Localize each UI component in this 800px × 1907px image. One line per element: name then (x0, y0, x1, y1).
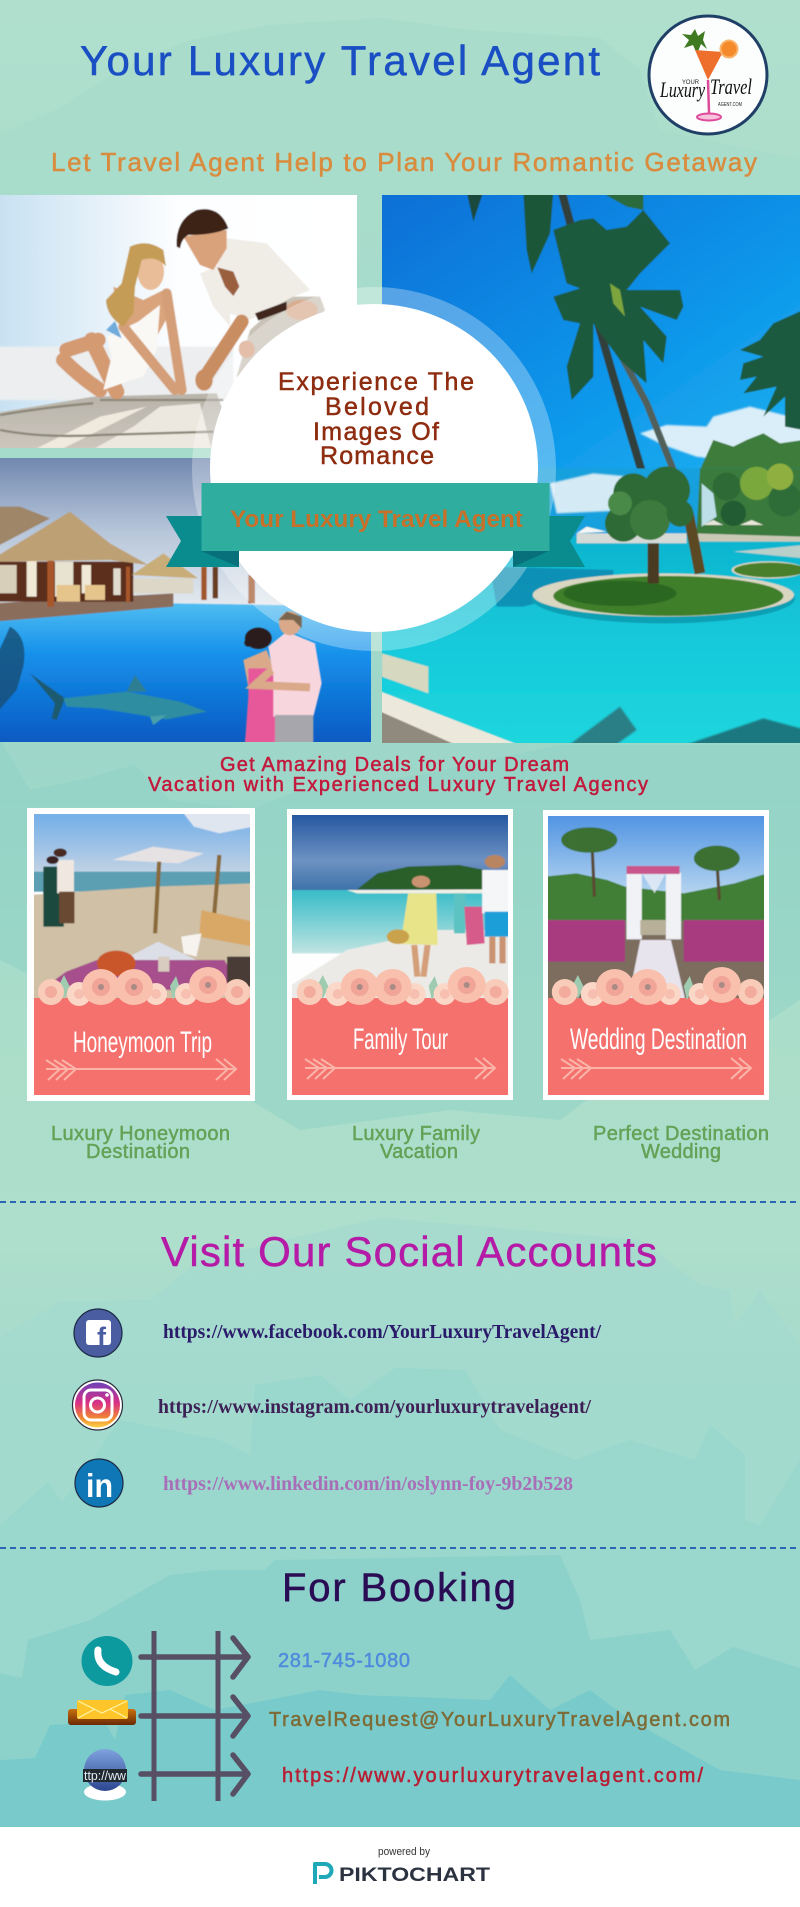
caption: family: Vacation (380, 1141, 458, 1163)
icon: email (68, 1700, 136, 1725)
wedding photo (545, 814, 767, 1003)
couple in front of ring (243, 611, 322, 745)
honeymoon photo (31, 813, 253, 1003)
palm on logo (682, 29, 707, 54)
phone number: 281-745-1080 (278, 1650, 410, 1672)
photo: couple on the beach (0, 190, 367, 457)
icon: globe (83, 1749, 127, 1800)
honeymoon arrow (46, 1059, 236, 1080)
logo script luxury: Luxury (659, 77, 705, 102)
man (237, 297, 325, 377)
line 4: Romance (320, 442, 434, 470)
family photo (289, 813, 511, 1003)
card: wedding destination (543, 810, 769, 1100)
orange slice (720, 40, 738, 58)
glass stem (708, 80, 709, 113)
wedding arrow (561, 1058, 751, 1079)
line 1: Experience The (278, 368, 474, 396)
icon: facebook: f (97, 1322, 107, 1352)
family arrow (305, 1058, 495, 1079)
card: honeymoon trip (27, 808, 255, 1101)
footer band (0, 1827, 800, 1907)
linkedin link: https://www.linkedin.com/in/oslynn-foy-9b2b528 (163, 1473, 573, 1495)
ladder arrows graphic (141, 1631, 248, 1801)
logo badge (649, 16, 767, 134)
arrow: email (141, 1697, 248, 1736)
caption: wedding: Wedding (641, 1141, 721, 1163)
cocktail glass (695, 50, 723, 80)
website url: https://www.yourluxurytravelagent.com/ (282, 1765, 703, 1787)
icon: linkedin (75, 1459, 123, 1507)
deals text (148, 754, 648, 796)
instagram link: https://www.instagram.com/yourluxurytravelagent/ (158, 1396, 591, 1418)
piktochart wordmark: PIKTOCHART (339, 1865, 490, 1886)
deals line 1: Get Amazing Deals for Your Dream (220, 754, 569, 776)
honeymoon label: Honeymoon Trip (73, 1026, 212, 1059)
palm lagoon (377, 463, 800, 750)
icon: phone (82, 1636, 132, 1686)
distant palm cluster (697, 463, 800, 537)
heading in circle (278, 368, 474, 470)
left fold (201, 551, 239, 567)
palm sky (382, 195, 800, 469)
email address: TravelRequest@YourLuxuryTravelAgent.com (269, 1709, 730, 1731)
facebook link: https://www.facebook.com/YourLuxuryTravelAgent/ (163, 1321, 601, 1343)
social heading: Visit Our Social Accounts (161, 1228, 657, 1275)
ribbon banner (166, 483, 585, 567)
card: family tour (287, 809, 513, 1100)
logo script travel: Travel (710, 74, 752, 99)
icon: globe: ttp://ww (84, 1768, 127, 1783)
logo small word agent: AGENT.COM (718, 102, 742, 108)
caption: family (352, 1123, 480, 1163)
icon: facebook (74, 1309, 122, 1357)
translucent ring (192, 287, 556, 651)
left tail (166, 516, 239, 567)
booking heading: For Booking (282, 1566, 516, 1610)
icon: linkedin: in (86, 1467, 113, 1504)
right fold (513, 551, 549, 567)
photo: palm trees and lagoon (377, 187, 800, 750)
shark (30, 673, 207, 725)
woman (63, 360, 100, 390)
powered by: powered by (378, 1846, 430, 1858)
white centre circle (210, 304, 538, 632)
arrow: phone (141, 1638, 248, 1677)
ribbon panel (202, 483, 550, 551)
caption: honeymoon (51, 1123, 230, 1163)
caption: wedding (593, 1123, 769, 1163)
caption: honeymoon: Luxury Honeymoon (51, 1123, 230, 1145)
ribbon text: Your Luxury Travel Agent (230, 506, 523, 533)
icon: instagram (72, 1380, 122, 1430)
caption: family: Luxury Family (352, 1123, 480, 1145)
title: Your Luxury Travel Agent (80, 37, 600, 84)
logo small word your: YOUR (682, 80, 700, 86)
arrow: web (141, 1755, 248, 1794)
caption: wedding: Perfect Destination (593, 1123, 769, 1145)
piktochart logo mark (315, 1864, 332, 1884)
foreground tree crown (605, 467, 693, 542)
line 3: Images Of (313, 418, 439, 446)
subtitle: Let Travel Agent Help to Plan Your Romantic Getaway (51, 147, 757, 177)
right tail (513, 516, 585, 567)
line 2: Beloved (325, 393, 429, 421)
glass base (697, 114, 721, 120)
caption: honeymoon: Destination (86, 1141, 190, 1163)
photo: overwater resort with shark (0, 453, 380, 750)
deals line 2: Vacation with Experienced Luxury Travel Agency (148, 774, 648, 796)
family label: Family Tour (353, 1023, 448, 1056)
